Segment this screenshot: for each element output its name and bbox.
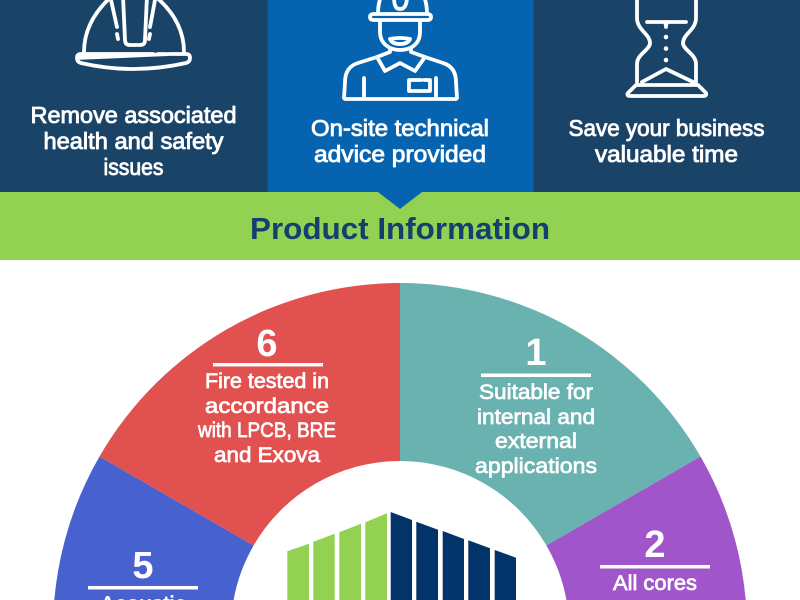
segment 6: fire tested: and Exova <box>214 444 320 467</box>
segment 6: fire tested <box>100 283 400 546</box>
segment 1: internal and external: applications <box>475 455 597 478</box>
segment 6: fire tested: accordance <box>205 395 329 418</box>
icon: hard hat <box>77 0 190 69</box>
segment 2: all cores: All cores <box>613 572 697 595</box>
text: remove associated health and safety issues <box>30 102 236 180</box>
icon: building panels <box>287 512 516 600</box>
semicircle chart: product features <box>53 283 747 600</box>
section band: product information <box>0 192 800 260</box>
text: remove associated health and safety issues: issues <box>104 154 164 180</box>
text: remove associated health and safety issues: Remove associated <box>30 102 236 128</box>
text: on-site technical advice provided: On-site technical <box>311 115 489 141</box>
segment 6: fire tested: Fire tested in <box>205 370 329 393</box>
icon: hourglass <box>627 0 706 96</box>
segment 2: all cores <box>546 456 747 600</box>
segment 6: fire tested: with LPCB, BRE <box>197 419 336 442</box>
text: remove associated health and safety issues: health and safety <box>44 128 224 154</box>
text: save your business valuable time <box>568 115 764 167</box>
segment 5: acoustic <box>53 456 254 600</box>
segment 1: internal and external <box>400 283 700 546</box>
segment 5: acoustic: 5 <box>132 545 154 587</box>
segment 2: all cores: 2 <box>644 524 666 566</box>
text: on-site technical advice provided: advice provided <box>314 141 486 167</box>
text: save your business valuable time: valuable time <box>595 141 738 167</box>
icon: worker with helmet <box>344 0 457 99</box>
segment 1: internal and external: internal and <box>477 406 595 429</box>
segment 1: internal and external: external <box>495 430 577 453</box>
panel: save business time <box>534 0 800 192</box>
panel: on-site technical advice <box>268 0 534 192</box>
segment 1: internal and external: 1 <box>525 332 547 374</box>
text: save your business valuable time: Save your business <box>568 115 764 141</box>
segment 6: fire tested: 6 <box>256 323 278 365</box>
heading: product information: Product Information <box>250 211 550 246</box>
text: on-site technical advice provided <box>311 115 489 167</box>
panel: remove health and safety issues <box>0 0 268 192</box>
segment 1: internal and external: Suitable for <box>479 381 593 404</box>
